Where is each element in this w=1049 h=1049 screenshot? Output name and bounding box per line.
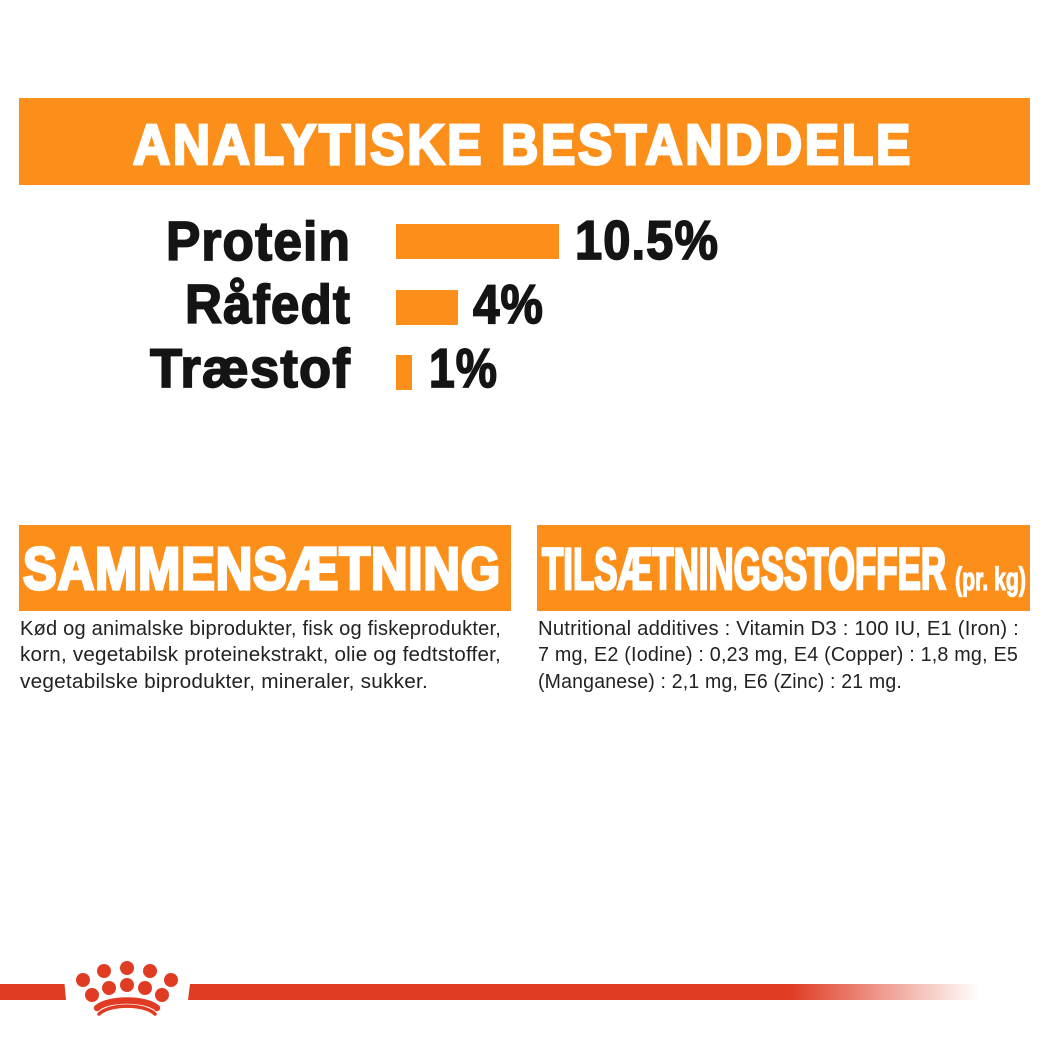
heading: analytiske bestanddele: ANALYTISKE BESTANDDELE (133, 113, 913, 177)
panel: analytical constituents header (19, 98, 1030, 185)
text: additives: 7 mg, E2 (Iodine) : 0,23 mg, E4 (Copper) : 1,8 mg, E5 (538, 643, 1018, 666)
row: råfedt: Råfedt (185, 273, 351, 335)
row: protein (166, 209, 719, 272)
footer red line: right fading (188, 984, 980, 1000)
text: additives: (Manganese) : 2,1 mg, E6 (Zinc) : 21 mg. (538, 670, 902, 693)
row: træstof: Træstof (150, 337, 351, 399)
icon: royal canin crown logo (76, 961, 178, 1014)
text: composition: korn, vegetabilsk proteinekstrakt, olie og fedtstoffer, (20, 643, 501, 666)
bar chart: analytical constituents (150, 209, 719, 399)
panel: sammensætning (19, 525, 511, 693)
heading: sammensætning: SAMMENSÆTNING (23, 536, 501, 602)
footer red line: left (0, 984, 66, 1000)
text: composition (20, 617, 501, 693)
row: træstof: 1% (429, 337, 498, 399)
text: additives (538, 617, 1019, 693)
row: råfedt (185, 273, 544, 335)
text: composition: vegetabilske biprodukter, mineraler, sukker. (20, 670, 428, 693)
row: protein: 10.5% (575, 209, 719, 271)
row: træstof (150, 337, 498, 399)
text: additives: Nutritional additives : Vitamin D3 : 100 IU, E1 (Iron) : (538, 617, 1019, 640)
row: protein: Protein (166, 210, 351, 272)
panel: tilsætningsstoffer (537, 525, 1030, 693)
row: råfedt: 4% (473, 273, 544, 335)
text: composition: Kød og animalske biprodukter, fisk og fiskeprodukter, (20, 617, 501, 640)
